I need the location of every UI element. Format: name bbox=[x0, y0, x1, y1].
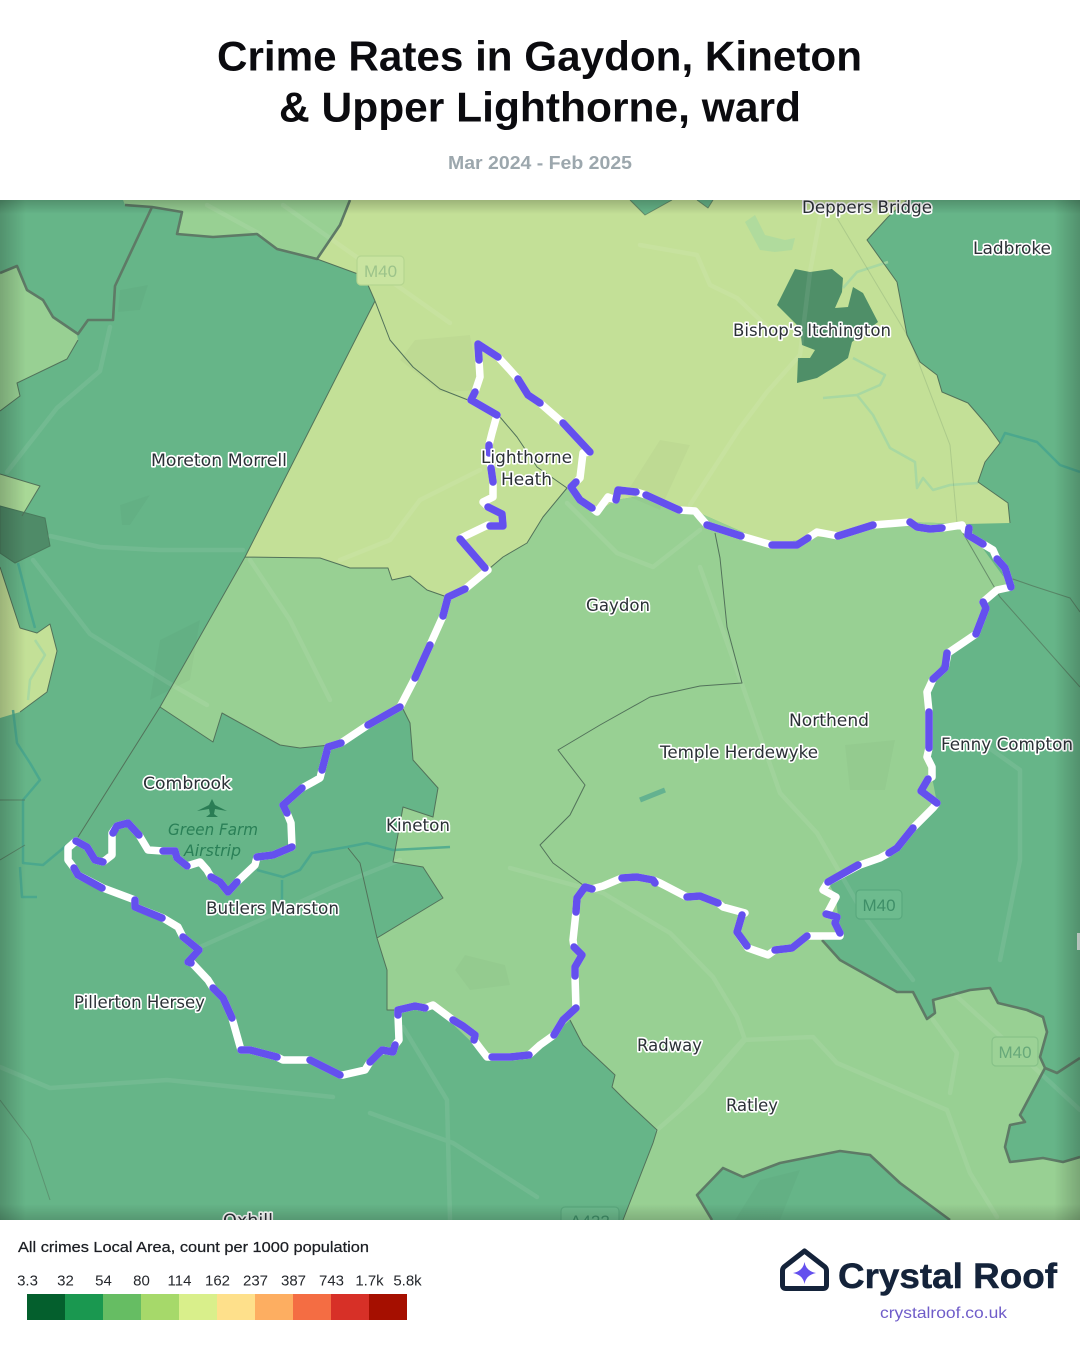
map area: far-left mid green bbox=[0, 266, 78, 411]
legend values: 3.3 bbox=[17, 1272, 38, 1290]
label: Combrook: Combrook bbox=[143, 774, 231, 793]
label: Northend: Northend bbox=[789, 711, 869, 730]
label: Butlers Marston: Butlers Marston bbox=[206, 899, 339, 918]
legend title: All crimes Local Area, count per 1000 population bbox=[18, 1239, 369, 1256]
panel: choropleth map bbox=[0, 198, 1080, 1236]
road shield: M40 east: M40 bbox=[862, 896, 896, 915]
map area: far-right dark wedge bbox=[1005, 1058, 1080, 1162]
label: Moreton Morrell: Moreton Morrell bbox=[151, 451, 287, 470]
legend values: 387 bbox=[281, 1272, 306, 1290]
logo: Crystal Roof bbox=[782, 1251, 1057, 1322]
map area: north yellow-green zone bbox=[245, 200, 1010, 597]
panel: footer bbox=[0, 1220, 1080, 1350]
legend values: 80 bbox=[133, 1272, 150, 1290]
label: Lighthorne: Lighthorne bbox=[481, 448, 572, 467]
map area: Bishop's Itchington dark patch bbox=[777, 269, 878, 383]
label: Temple Herdewyke: Temple Herdewyke bbox=[659, 743, 818, 762]
website url: crystalroof.co.uk bbox=[880, 1305, 1008, 1322]
label: Oxhill: Oxhill bbox=[223, 1211, 273, 1230]
legend values bbox=[17, 1272, 422, 1290]
logo wordmark: Crystal Roof bbox=[838, 1257, 1057, 1296]
legend values: 743 bbox=[319, 1272, 344, 1290]
map area: central and southern mid green zone bbox=[377, 488, 1080, 1220]
map area: left yellow patch bbox=[0, 567, 57, 718]
map area: mid green west of ward bbox=[160, 557, 447, 748]
map area: top-left mid green band bbox=[123, 200, 350, 259]
legend values: 54 bbox=[95, 1272, 112, 1290]
label: Fenny Compton: Fenny Compton bbox=[941, 735, 1073, 754]
label: Gaydon: Gaydon bbox=[586, 596, 650, 615]
road shield: M40 north bbox=[357, 256, 404, 285]
road shield: M40 east bbox=[856, 890, 902, 919]
map area: left dark patch bbox=[0, 506, 50, 563]
label: Deppers Bridge: Deppers Bridge bbox=[802, 198, 932, 217]
label: Pillerton Hersey: Pillerton Hersey bbox=[74, 993, 205, 1012]
road shield: M40 south-east bbox=[992, 1037, 1038, 1066]
title: Crime Rates in Gaydon, Kineton bbox=[217, 32, 862, 80]
title: & Upper Lighthorne, ward bbox=[279, 84, 801, 130]
label: Radway: Radway bbox=[637, 1036, 702, 1055]
road shield: M40 south-east: M40 bbox=[998, 1043, 1032, 1062]
label: Ladbroke: Ladbroke bbox=[973, 239, 1051, 258]
label: Kineton: Kineton bbox=[386, 816, 450, 835]
legend colour scale bbox=[27, 1294, 407, 1320]
ward boundary: white base line bbox=[68, 344, 1011, 1075]
label: Green Farm Airstrip: Green Farm bbox=[168, 820, 258, 839]
label: Green Farm Airstrip: Airstrip bbox=[183, 841, 241, 860]
legend bbox=[17, 1239, 422, 1320]
legend values: 162 bbox=[205, 1272, 230, 1290]
map edge shield fragment bbox=[1077, 933, 1080, 950]
road shield: A422: A422 bbox=[570, 1212, 610, 1231]
ward boundary: purple dashes bbox=[74, 344, 1011, 1075]
map area: left fringe light patch bbox=[0, 474, 40, 516]
map: boundary lines bbox=[0, 200, 1080, 1220]
map edge vignette bbox=[0, 200, 1080, 1220]
legend values: 1.7k bbox=[355, 1272, 384, 1290]
place labels bbox=[74, 198, 1073, 1230]
map: roads bbox=[0, 205, 1080, 1220]
label: Bishop's Itchington: Bishop's Itchington bbox=[733, 321, 891, 340]
label: Heath: Heath bbox=[501, 470, 552, 489]
title bbox=[217, 32, 862, 130]
road shield: M40 north: M40 bbox=[364, 262, 397, 281]
icon: house with star bbox=[782, 1251, 826, 1288]
map: rivers bbox=[13, 215, 1080, 917]
legend values: 5.8k bbox=[393, 1272, 422, 1290]
icon: airstrip bbox=[197, 799, 227, 817]
legend values: 114 bbox=[168, 1272, 191, 1290]
legend values: 32 bbox=[57, 1272, 74, 1290]
label: Ratley: Ratley bbox=[726, 1096, 778, 1115]
map: field texture bbox=[118, 285, 895, 1220]
legend values: 237 bbox=[243, 1272, 268, 1290]
label: Green Farm Airstrip bbox=[168, 820, 258, 860]
subtitle: date range: Mar 2024 - Feb 2025 bbox=[448, 153, 632, 173]
panel: header bbox=[0, 0, 1080, 200]
road shield: A422 bbox=[561, 1207, 619, 1236]
